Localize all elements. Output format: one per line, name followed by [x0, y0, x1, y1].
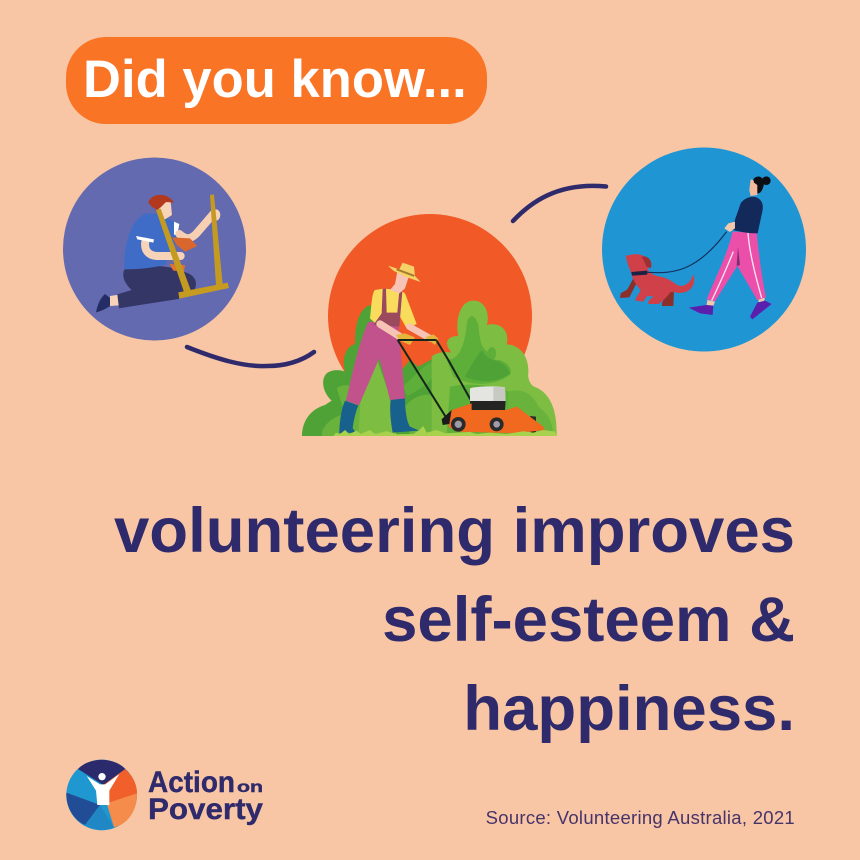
logo wordmark: Poverty: [148, 793, 263, 826]
logo wordmark: Action: [148, 766, 235, 799]
mower: [398, 340, 545, 434]
headline: [114, 496, 795, 744]
illustration: man building with drill: [63, 158, 246, 340]
logo wordmark: [148, 766, 263, 826]
headline: volunteering improves: [114, 496, 795, 566]
logo wordmark: on: [237, 779, 263, 796]
woman: [689, 176, 772, 319]
connector curve: left: [187, 347, 314, 366]
grass: [333, 426, 557, 436]
gardener: [339, 263, 438, 433]
source note: Source: Volunteering Australia, 2021: [486, 807, 795, 828]
illustration: person mowing lawn: [302, 214, 557, 436]
badge: Did you know: [66, 37, 487, 124]
bushes: [302, 301, 557, 436]
connector curve: right: [513, 186, 606, 221]
logo mark: [66, 760, 137, 830]
headline: self-esteem &: [382, 585, 795, 655]
dog: [620, 254, 694, 306]
logo: Action on Poverty: [66, 760, 263, 830]
badge: Did you know: Did you know...: [83, 50, 467, 109]
headline: happiness.: [463, 674, 795, 744]
illustration: woman walking dog: [602, 148, 806, 352]
